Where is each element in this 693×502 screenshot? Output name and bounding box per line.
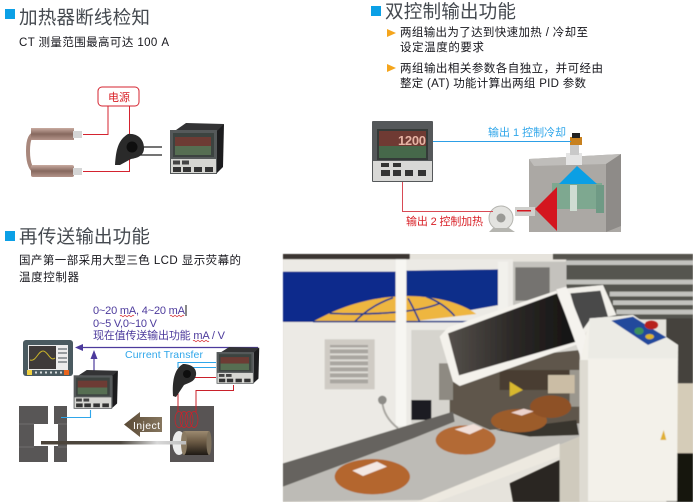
icon: cooling valve [566, 133, 582, 165]
heading: heater break detection: 加热器断线检知 [19, 7, 150, 28]
panel: heater break detection [5, 7, 224, 177]
text: LCD description: 国产第一部采用大型三色 LCD 显示荧幕的 [19, 253, 241, 267]
panel: dual control output [371, 1, 621, 232]
bullet list [387, 25, 603, 90]
text: output ranges: 0~20 mA, 4~20 mA [93, 305, 186, 317]
panel: retransmission output [5, 226, 259, 462]
icon: current transformer [115, 134, 144, 165]
text: bullet one: 两组输出为了达到快速加热 / 冷却至 [400, 25, 588, 39]
icon: controller [372, 121, 433, 182]
icon: mold [19, 406, 67, 462]
arrow: inject: Inject [133, 420, 160, 432]
label: output two: 输出 2 控制加热 [406, 214, 483, 228]
icon: bullet one [387, 29, 396, 37]
text: output ranges: 现在值传送输出功能 mA / V [93, 328, 226, 342]
line: output two [402, 182, 493, 212]
label: current transfer: Current Transfer [125, 349, 204, 361]
diagram: injection retransmission [19, 305, 259, 462]
icon: chamber box [529, 154, 621, 232]
line: output one [433, 140, 571, 142]
diagram: heater circuit [28, 87, 224, 177]
text: LCD description: 温度控制器 [19, 270, 80, 284]
arrow: inject [124, 412, 162, 437]
text: bullet two: 两组输出相关参数各自独立，并可经由 [400, 61, 603, 75]
icon: heading square [5, 9, 15, 19]
arrow: current transfer [75, 344, 258, 351]
text: bullet two: 整定 (AT) 功能计算出两组 PID 参数 [400, 76, 586, 90]
icon: heading square [5, 231, 15, 241]
icon: heater coil [28, 128, 82, 177]
wires: black signal lines [139, 147, 162, 155]
diagram: dual output [372, 121, 621, 232]
icon: right controller [217, 347, 259, 384]
icon: current transformer [173, 364, 196, 397]
icon: fan [489, 206, 535, 232]
wires: red heater lines [178, 378, 234, 412]
arrow: upward to display [90, 350, 98, 371]
icon: heading square [371, 6, 381, 16]
icon: red triangle [535, 187, 557, 231]
icon: barrel block [170, 406, 214, 462]
text: output ranges [93, 305, 226, 342]
line: sensor to controller [61, 410, 90, 418]
wires: red power lines [83, 106, 130, 172]
icon: blue triangle [559, 166, 597, 184]
photo: bread packaging machine [283, 254, 693, 502]
icon: bullet two [387, 64, 396, 72]
heading: dual control output: 双控制输出功能 [385, 1, 516, 22]
text: output ranges: 0~5 V,0~10 V [93, 318, 158, 330]
icon: controller [170, 123, 224, 174]
label: power source [98, 87, 139, 106]
icon: left controller [74, 370, 118, 409]
text: CT range: CT 测量范围最高可达 100 A [19, 35, 169, 49]
heading: retransmission output: 再传送输出功能 [19, 226, 150, 247]
text: bullet one: 设定温度的要求 [400, 40, 484, 54]
icon: controller: 1200 [398, 133, 426, 148]
icon: heater coil [175, 412, 198, 428]
label: output one: 输出 1 控制冷却 [488, 125, 566, 139]
icon: cylinder [172, 431, 212, 455]
wires: heater coil leads [178, 406, 196, 412]
label: power source: 电源 [108, 90, 130, 104]
icon: screw shaft [41, 441, 186, 444]
wires: blue sensor lines [178, 362, 216, 368]
icon: recorder display [23, 340, 73, 376]
